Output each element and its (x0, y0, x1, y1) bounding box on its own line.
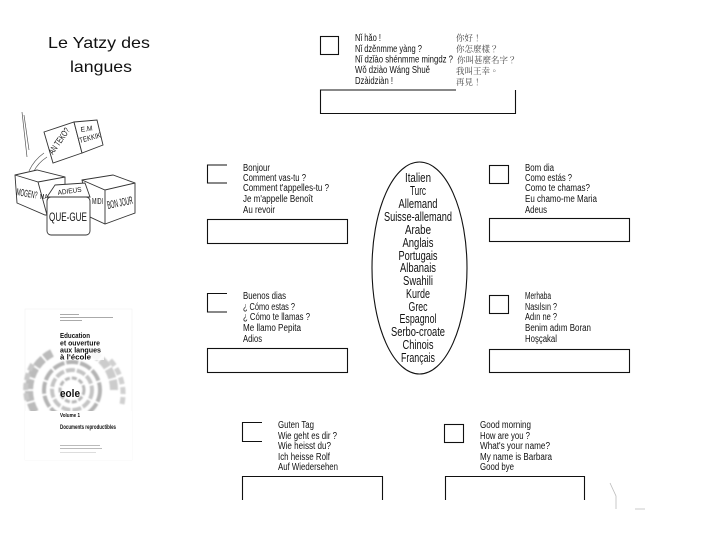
Chinese characters: 再見！ (456, 76, 482, 88)
cover: eole logo: eole (60, 388, 80, 400)
title (48, 35, 150, 76)
panel: French (208, 163, 348, 244)
phrases: Good morning (480, 420, 531, 431)
checkbox (320, 36, 338, 54)
cover: subtitle: Documents reproductibles (60, 425, 116, 431)
book cover (25, 309, 132, 460)
language names: Allemand (398, 197, 438, 211)
panel: Turkish (490, 291, 630, 372)
stray marks (610, 483, 645, 509)
phrases: Hoşçakal (525, 334, 557, 345)
pinyin phrases: Dzàidziàn ! (355, 76, 393, 87)
language names: Turc (410, 184, 426, 198)
phrases: Ich heisse Rolf (278, 452, 330, 463)
phrases: Je m'appelle Benoît (243, 194, 313, 205)
cover: swirl of words (26, 353, 123, 418)
phrases: Comment vas-tu ? (243, 173, 306, 184)
phrases: Me llamo Pepita (243, 323, 301, 334)
cover: white band behind title (58, 331, 104, 360)
icon: motion lines (22, 112, 29, 157)
panel: Portuguese (490, 163, 630, 242)
language names: Français (401, 351, 435, 365)
phrases: Eu chamo-me Maria (525, 194, 597, 205)
phrases: Adios (243, 334, 262, 345)
panel: German (242, 420, 382, 500)
checkbox (490, 166, 508, 184)
cover: title: Education (60, 331, 90, 340)
phrases (243, 291, 310, 345)
phrases: ¿ Cómo estas ? (243, 302, 295, 313)
die: left: MA (40, 194, 48, 201)
card: second thrown die face: E.M (80, 125, 93, 134)
checkbox (242, 422, 262, 442)
pinyin phrases: Nǐ dzǐào shénmme mingdz ? (355, 54, 453, 66)
panel: Chinese (320, 32, 517, 114)
answer box (446, 476, 584, 500)
die: centre: ADIEUS (57, 187, 82, 197)
phrases: Adeus (525, 205, 547, 216)
phrases: Comment t'appelles-tu ? (243, 183, 329, 194)
language names: Arabe (405, 223, 431, 237)
phrases (480, 420, 552, 473)
phrases: Como te chamas? (525, 183, 590, 194)
phrases: My name is Barbara (480, 452, 552, 463)
phrases: Wie geht es dir ? (278, 431, 337, 442)
phrases: Guten Tag (278, 420, 314, 431)
die: left: MOGEN? (15, 187, 38, 202)
language names: Portugais (398, 249, 438, 263)
card: second thrown die face (74, 120, 103, 153)
die: centre (47, 183, 90, 235)
phrases: Buenos dias (243, 291, 286, 302)
language names (384, 171, 452, 365)
phrases: ¿ Cómo te llamas ? (243, 312, 310, 323)
language names: Chinois (402, 338, 434, 352)
title: Le Yatzy des (48, 35, 150, 52)
phrases: What's your name? (480, 441, 550, 452)
panel: English (444, 420, 584, 500)
Chinese characters (456, 32, 517, 88)
checkbox (444, 424, 464, 442)
phrases (278, 420, 338, 473)
checkbox (208, 294, 227, 312)
phrases (525, 291, 591, 345)
Chinese characters: 你怎麼樣？ (456, 43, 499, 55)
language names: Swahili (403, 274, 433, 288)
answer box (490, 218, 630, 242)
text: BON JOUR (106, 195, 134, 212)
phrases: Merhaba (525, 291, 551, 302)
answer box (208, 220, 348, 244)
cover: publisher lines (60, 314, 113, 321)
phrases: Wie heisst du? (278, 441, 331, 452)
die: right: MIDI (92, 197, 103, 206)
phrases: How are you ? (480, 431, 530, 442)
illustration: language dice (15, 112, 135, 235)
pinyin phrases (355, 33, 453, 87)
panel: Spanish (208, 291, 348, 372)
phrases: Bom dia (525, 163, 554, 174)
language names: Espagnol (400, 312, 436, 326)
die: right (82, 175, 135, 224)
card: second thrown die face: TEKKIK (78, 131, 102, 145)
answer box (490, 350, 630, 372)
die: left (15, 170, 65, 215)
pinyin phrases: Nǐ hǎo ! (355, 33, 381, 44)
language names: Suisse-allemand (384, 210, 452, 224)
answer box (242, 476, 382, 500)
pinyin phrases: Wǒ dziào Wáng Shuě (355, 65, 430, 76)
phrases: Benim adım Boran (525, 323, 591, 334)
language names: Italien (405, 171, 431, 185)
phrases: Como estás ? (525, 173, 572, 184)
language names: Serbo-croate (391, 325, 445, 339)
cover: white band behind lower text (25, 411, 132, 460)
cover: footer lines (60, 445, 102, 453)
answer box (208, 348, 348, 372)
language names: Grec (408, 300, 428, 314)
checkbox (490, 296, 508, 314)
pinyin phrases: Nǐ dzěnmme yàng ? (355, 44, 422, 55)
phrases: Good bye (480, 462, 514, 473)
Chinese characters: 你叫甚麼名字？ (457, 54, 517, 66)
phrases: Nasılsın ? (525, 302, 557, 313)
language names: Albanais (400, 261, 436, 275)
title: langues (70, 59, 132, 76)
language names: Anglais (402, 236, 434, 250)
ellipse (372, 162, 467, 374)
Chinese characters: 你好！ (456, 32, 482, 44)
phrases: Bonjour (243, 163, 271, 174)
phrases (243, 163, 329, 216)
cover: title: et ouverture (60, 338, 100, 348)
cover: title (60, 331, 101, 362)
phrases: Adın ne ? (525, 312, 557, 323)
cover: title: aux langues (60, 346, 101, 354)
language names: Kurde (406, 287, 430, 301)
card: first thrown die face: AN TEKO? (46, 126, 72, 156)
phrases: Au revoir (243, 205, 276, 216)
panel: language list ellipse (372, 162, 467, 374)
answer box (320, 90, 516, 114)
Chinese characters: 我叫王幸。 (456, 65, 499, 77)
cover: title: à l'école (60, 352, 91, 362)
icon: throw curve (29, 153, 47, 171)
die: centre: QUE-GUE (49, 210, 87, 224)
phrases (525, 163, 597, 216)
cover: volume: Volume 1 (60, 413, 80, 419)
phrases: Auf Wiedersehen (278, 462, 338, 473)
checkbox (208, 165, 227, 183)
